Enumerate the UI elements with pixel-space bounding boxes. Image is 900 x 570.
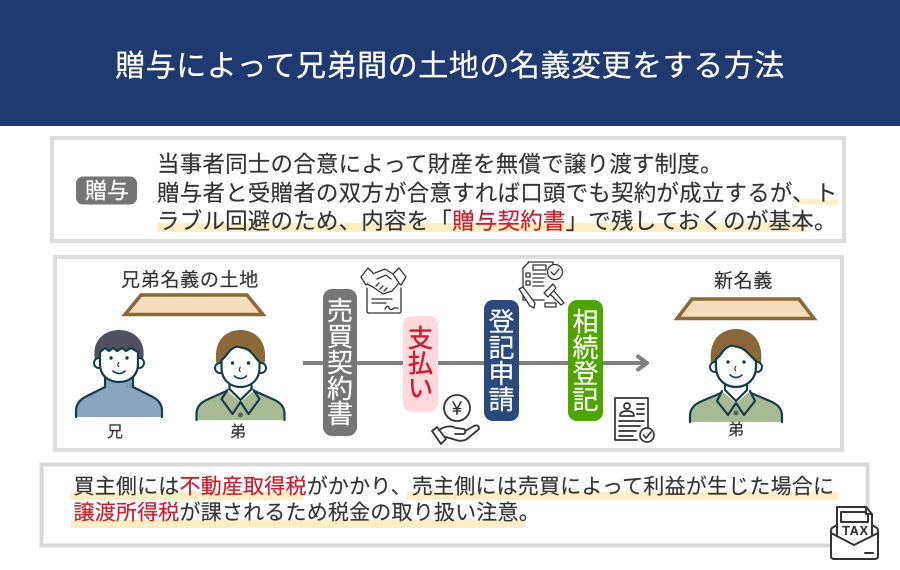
step: sales contract: 買 bbox=[327, 322, 353, 352]
text highlight: line 2 bbox=[797, 198, 838, 205]
step: sales contract: 書 bbox=[327, 399, 353, 429]
definition text bbox=[157, 152, 838, 234]
label: elder brother: 兄 bbox=[107, 424, 123, 441]
icon: yen over hand: ¥ bbox=[451, 398, 463, 418]
step: sales contract: 契 bbox=[327, 348, 353, 378]
step: registration application: 登 bbox=[488, 307, 515, 337]
step: registration application: 記 bbox=[488, 333, 515, 363]
icon: ID certificate bbox=[615, 398, 654, 442]
land plot: right bbox=[677, 299, 814, 318]
label: land in brothers' names: 兄弟名義の土地 bbox=[121, 269, 259, 291]
person: younger brother bbox=[196, 330, 286, 420]
text highlight: line 2 bbox=[71, 520, 525, 528]
icon: tax envelope bbox=[831, 507, 878, 559]
step: sales contract: 売 bbox=[327, 296, 353, 326]
text highlight: line 1 right bbox=[407, 492, 838, 500]
icon: handshake contract bbox=[361, 268, 406, 313]
step: registration application: 申 bbox=[488, 359, 515, 389]
step: payment bbox=[403, 316, 438, 412]
step: payment: 払 bbox=[408, 350, 433, 378]
step: inheritance registration: 相 bbox=[572, 307, 599, 337]
label: younger brother: 弟 bbox=[230, 423, 246, 441]
icon: tax envelope: TAX bbox=[842, 524, 869, 538]
header banner bbox=[0, 0, 900, 126]
person: new owner bbox=[689, 329, 783, 422]
tax note text bbox=[74, 476, 834, 524]
panel: definition of gift bbox=[52, 138, 844, 241]
icon: legal document with gavel bbox=[519, 262, 564, 308]
panel: tax note bbox=[42, 464, 868, 546]
label: younger brother as new owner: 弟 bbox=[728, 421, 744, 439]
step: inheritance registration: 記 bbox=[572, 385, 599, 415]
step: registration application bbox=[484, 300, 519, 421]
tax note text: 買主側には不動産取得税がかかり、売主側には売買によって利益が生じた場合に bbox=[74, 476, 834, 498]
step: inheritance registration: 続 bbox=[572, 333, 599, 363]
arrow: process timeline bbox=[303, 356, 647, 370]
badge: gift bbox=[76, 176, 137, 204]
step: inheritance registration: 登 bbox=[572, 359, 599, 389]
icon: yen over hand bbox=[432, 395, 479, 444]
step: payment: 支 bbox=[408, 325, 433, 353]
step: sales contract: 約 bbox=[327, 374, 353, 404]
land plot: left bbox=[125, 295, 263, 314]
definition text: 当事者同士の合意によって財産を無償で譲り渡す制度。 bbox=[157, 152, 723, 177]
label: new name: 新名義 bbox=[714, 270, 773, 292]
person: elder brother bbox=[75, 330, 163, 417]
text highlight: line 3 bbox=[157, 223, 806, 232]
panel: process diagram bbox=[55, 257, 842, 450]
definition text: ラブル回避のため、内容を「贈与契約書」で残しておくのが基本。 bbox=[157, 209, 837, 234]
step: registration application: 請 bbox=[488, 385, 515, 415]
tax note text: 譲渡所得税が課されるため税金の取り扱い注意。 bbox=[74, 502, 540, 524]
step: inheritance registration bbox=[568, 300, 603, 421]
badge: gift: 贈与 bbox=[85, 178, 129, 204]
definition text: 贈与者と受贈者の双方が合意すれば口頭でも契約が成立するが、ト bbox=[157, 181, 838, 206]
title: 贈与によって兄弟間の土地の名義変更をする方法 bbox=[115, 50, 785, 83]
step: sales contract bbox=[323, 289, 357, 436]
text highlight: line 1 left bbox=[71, 492, 303, 500]
step: payment: い bbox=[408, 375, 433, 403]
